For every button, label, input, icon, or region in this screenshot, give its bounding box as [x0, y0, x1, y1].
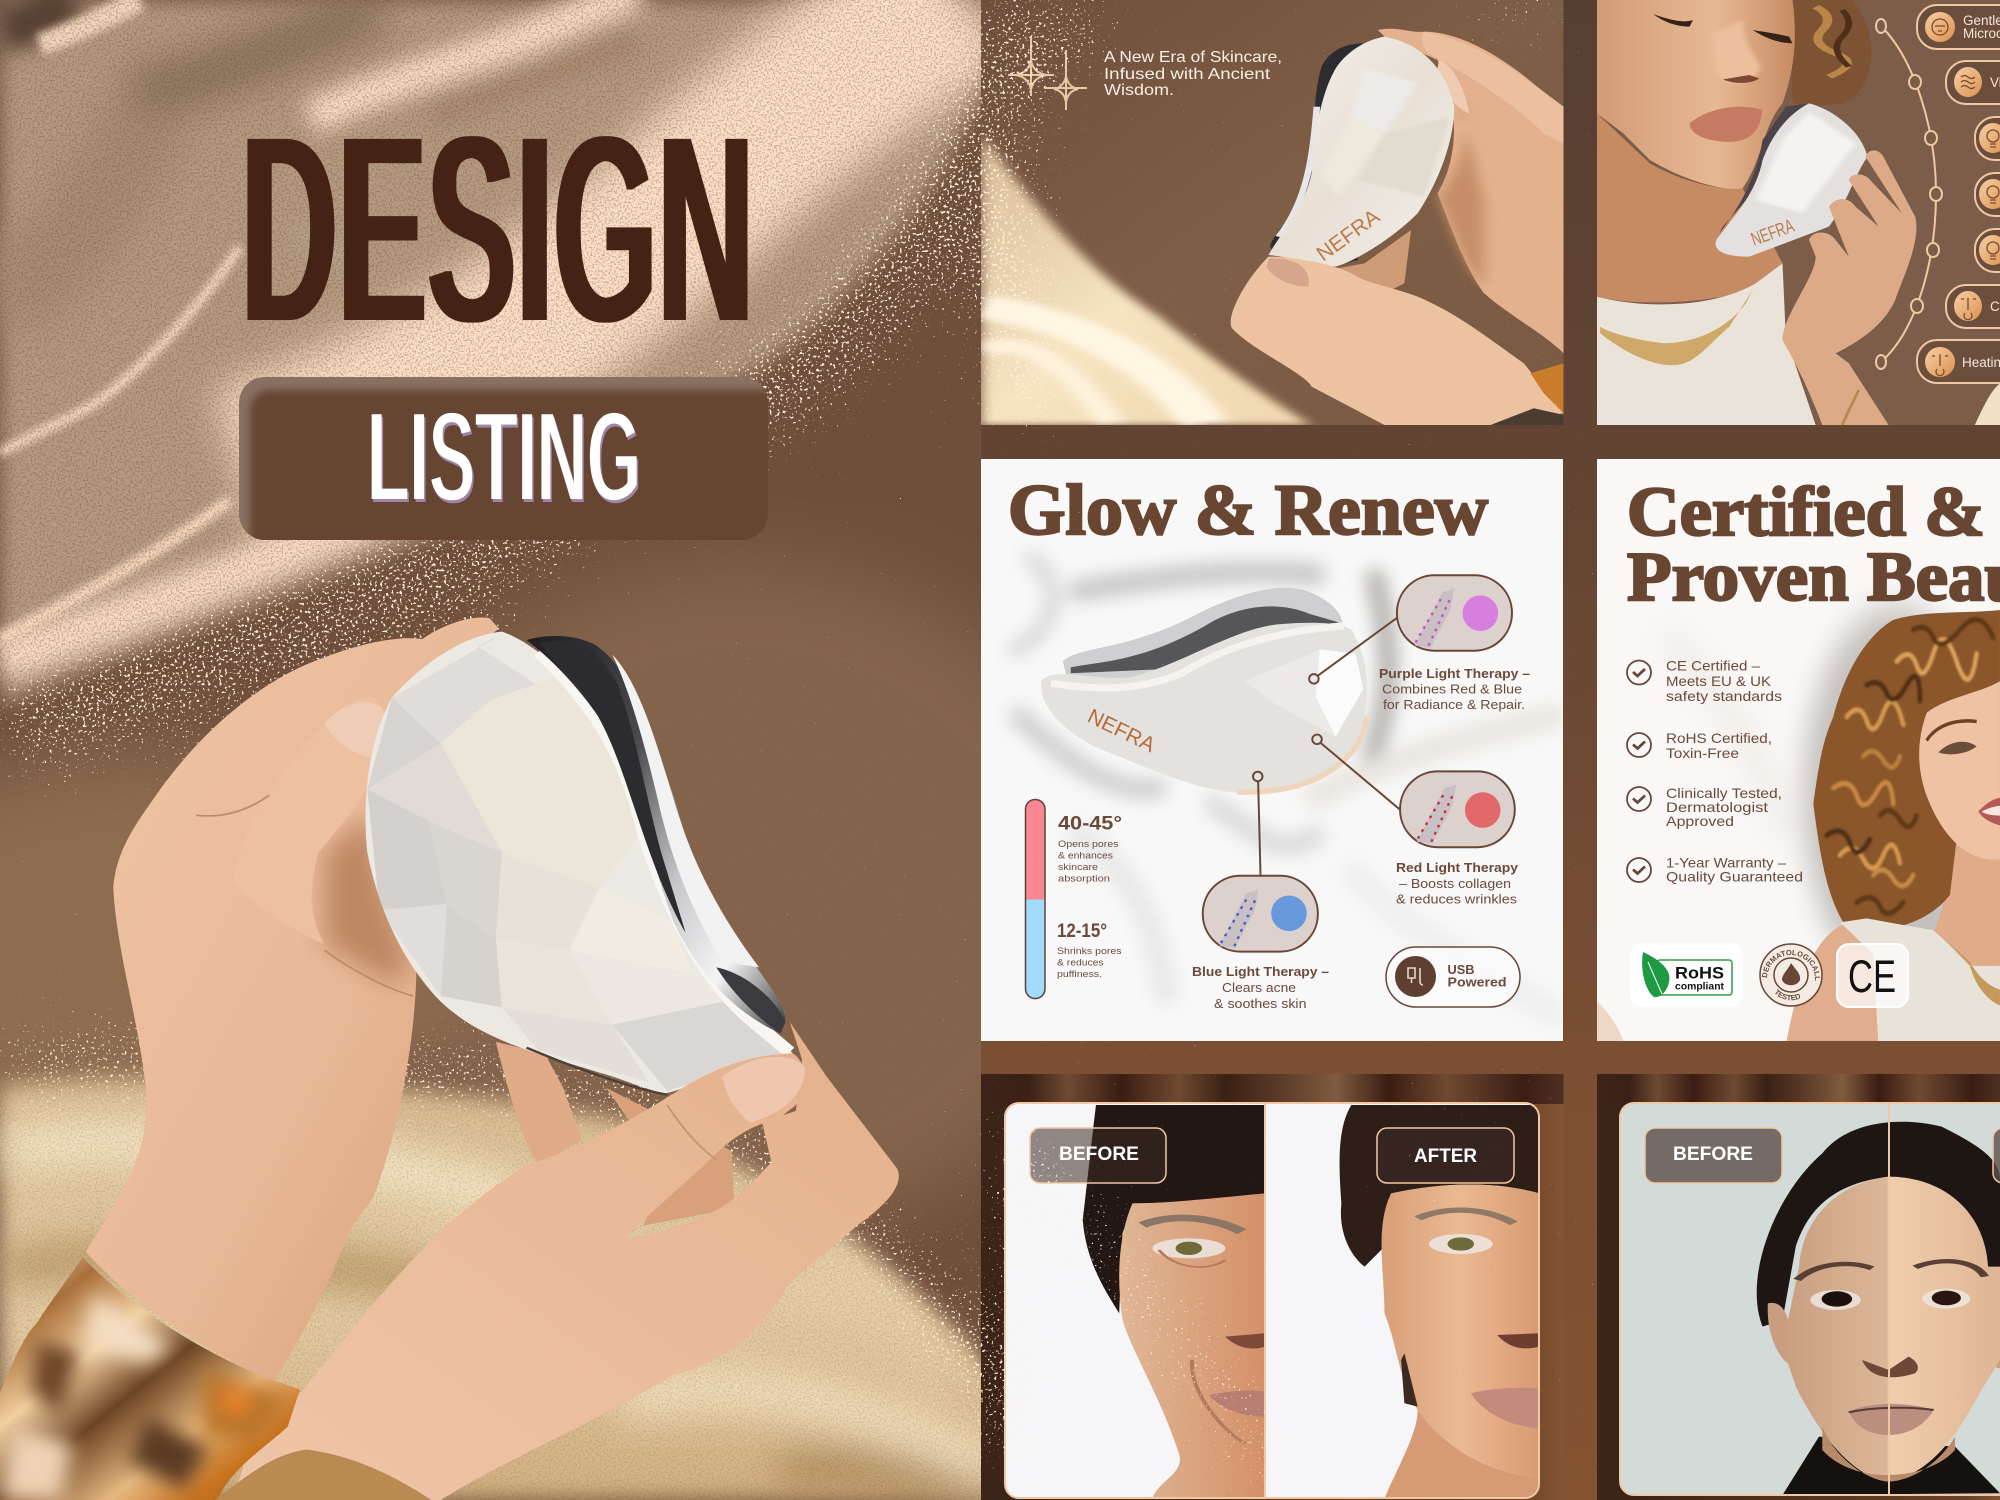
purple light pill	[1397, 575, 1512, 651]
icon: sparkle stars	[1008, 36, 1087, 110]
woman brow	[1927, 721, 1977, 741]
USB powered badge: USB	[1448, 963, 1474, 977]
hot temperature text: & enhances	[1058, 850, 1113, 862]
back fingers	[496, 1042, 735, 1226]
before label: BEFORE	[1059, 1144, 1139, 1165]
necklace	[1600, 290, 1753, 365]
after label: AFTER	[1414, 1146, 1477, 1167]
red light pill	[1400, 771, 1515, 847]
cold temperature text: Shrinks pores	[1057, 946, 1122, 957]
purple light caption	[1379, 666, 1530, 712]
ears	[1768, 1303, 2000, 1368]
left cuff bracelet	[0, 1257, 300, 1500]
text: DESIGN	[241, 77, 754, 381]
panel tagline: Infused with Ancient	[1104, 66, 1271, 83]
gold sand bottom	[0, 1078, 1010, 1500]
CE badge	[1837, 944, 1908, 1007]
before label	[1645, 1128, 1782, 1183]
nose shadow	[1862, 1357, 1918, 1377]
hot temperature text	[1058, 814, 1122, 884]
turtleneck	[1782, 1437, 2000, 1495]
right hand	[233, 1022, 899, 1500]
hot temperature text: absorption	[1058, 874, 1110, 884]
checklist: Clinically Tested,	[1666, 785, 1782, 801]
sand speckles	[0, 0, 1563, 1490]
RoHS badge: RoHS	[1675, 964, 1724, 982]
back fingers	[1338, 230, 1411, 289]
button label: LISTING	[367, 385, 641, 529]
woman top	[1840, 918, 2000, 1041]
button: listing	[239, 377, 790, 560]
red light caption: & reduces wrinkles	[1396, 892, 1518, 906]
face	[1782, 1177, 2000, 1482]
main hands holding device	[0, 618, 899, 1500]
hair	[1789, 0, 1871, 107]
panel: woman using device with feature arc	[1597, 0, 2000, 425]
CE badge: CE	[1848, 951, 1896, 1002]
panel tagline: A New Era of Skincare,	[1104, 49, 1282, 66]
blue light caption	[1192, 964, 1329, 1011]
checklist: CE Certified –	[1666, 658, 1760, 674]
jaw shadow	[1822, 1427, 1955, 1482]
blue light caption: Clears acne	[1222, 980, 1296, 995]
right cuff bracelet	[214, 1450, 432, 1500]
device	[1041, 588, 1367, 793]
sand swirl top-left	[0, 0, 1000, 705]
bracelet	[1530, 363, 1564, 413]
feature pills	[1917, 5, 2000, 383]
red light caption: – Boosts collagen	[1399, 876, 1511, 891]
device body	[365, 632, 793, 1094]
woman lips	[1978, 798, 2000, 826]
purple light caption: Combines Red & Blue	[1382, 682, 1522, 696]
eyes	[1810, 1289, 1970, 1310]
lips	[1849, 1404, 1934, 1435]
woman eye	[1938, 742, 1977, 754]
dermatologically tested badge	[1759, 943, 1823, 1007]
grid background behind panels	[981, 0, 2000, 1500]
card frame and divider	[1620, 1103, 2000, 1495]
feature arc	[1876, 19, 1942, 369]
checklist: 1-Year Warranty –	[1666, 854, 1786, 870]
after label	[1993, 1128, 2000, 1183]
device	[1716, 103, 1867, 257]
panel tagline: Wisdom.	[1104, 82, 1174, 99]
temperature bar	[1026, 800, 1045, 998]
RoHS badge	[1630, 943, 1743, 1007]
hand bottom	[1231, 257, 1564, 425]
bracelet shadow	[1491, 408, 1564, 425]
panel: glow and renew	[981, 459, 1563, 1041]
checklist: RoHS Certified,	[1666, 730, 1772, 746]
face	[1597, 0, 1795, 189]
dermatologically tested badge: DERMATOLOGICALLY	[1762, 950, 1820, 981]
fabric folds	[1015, 559, 1553, 1013]
hot temperature text: 40-45°	[1058, 814, 1122, 834]
cold temperature text	[1057, 921, 1122, 980]
checklist: Approved	[1666, 813, 1734, 829]
cold temperature text: & reduces	[1057, 958, 1104, 968]
red light caption	[1396, 860, 1519, 906]
left hand	[86, 618, 499, 1384]
before face	[1083, 1105, 1265, 1498]
facial features	[1653, 14, 1792, 142]
necklace	[1943, 938, 2000, 1005]
device chrome edge	[526, 636, 786, 1095]
hair	[1757, 1122, 2000, 1327]
blue light caption: Blue Light Therapy –	[1192, 964, 1329, 979]
panel: new era of skincare	[981, 0, 1564, 425]
after label	[1377, 1128, 1514, 1183]
panel: before and after acne	[1597, 1074, 2000, 1500]
hot temperature text: Opens pores	[1058, 839, 1119, 850]
cold temperature text: 12-15°	[1057, 921, 1107, 942]
hand from right	[1378, 29, 1564, 353]
heading	[1627, 474, 2000, 616]
checklist: Dermatologist	[1666, 799, 1768, 815]
panel: before and after wrinkles	[981, 1074, 1564, 1500]
purple light caption: Purple Light Therapy –	[1379, 666, 1530, 681]
USB powered badge: Powered	[1448, 976, 1506, 990]
red light caption: Red Light Therapy	[1396, 860, 1519, 875]
eyebrows	[1797, 1261, 1985, 1280]
RoHS badge: compliant	[1675, 982, 1725, 993]
checklist: Meets EU & UK	[1666, 673, 1772, 689]
panel tagline	[1104, 50, 1280, 95]
checklist: Toxin-Free	[1666, 745, 1739, 761]
panel: certified and proven beauty	[1597, 459, 2000, 1041]
dermatologically tested badge: TESTED	[1775, 989, 1800, 1000]
heading: Certified &	[1627, 474, 1985, 551]
woman teeth	[1982, 806, 2000, 816]
woman neck	[1933, 831, 2000, 970]
connector lines	[1253, 618, 1400, 875]
card frame and divider	[1005, 1103, 1539, 1498]
device logo: NEFRA	[1312, 205, 1384, 266]
after face	[1340, 1105, 1539, 1498]
left background	[0, 0, 1120, 1500]
blue light caption: & soothes skin	[1214, 996, 1306, 1011]
neck	[1597, 113, 1782, 302]
device logo: NEFRA	[1084, 705, 1159, 757]
checklist: safety standards	[1666, 688, 1782, 704]
device	[1268, 37, 1454, 267]
heading: Glow & Renew	[1008, 470, 1488, 550]
device logo: NEFRA	[1749, 216, 1797, 251]
cold temperature text: puffiness.	[1057, 969, 1102, 980]
woman shoulder	[1787, 924, 1878, 1041]
before label	[1030, 1128, 1166, 1183]
woman hair	[1813, 610, 2000, 929]
sand grain texture	[0, 0, 1000, 1500]
shirt	[1597, 263, 1816, 425]
hot temperature text: skincare	[1058, 862, 1098, 873]
blue light pill	[1203, 876, 1318, 952]
checklist: Quality Guaranteed	[1666, 869, 1803, 885]
before label: BEFORE	[1673, 1144, 1753, 1165]
checklist	[1627, 658, 1803, 885]
hand	[1782, 150, 1916, 425]
USB powered badge	[1386, 947, 1520, 1007]
bracelet	[1842, 390, 1859, 425]
purple light caption: for Radiance & Repair.	[1383, 697, 1525, 712]
woman face	[1919, 681, 2000, 860]
